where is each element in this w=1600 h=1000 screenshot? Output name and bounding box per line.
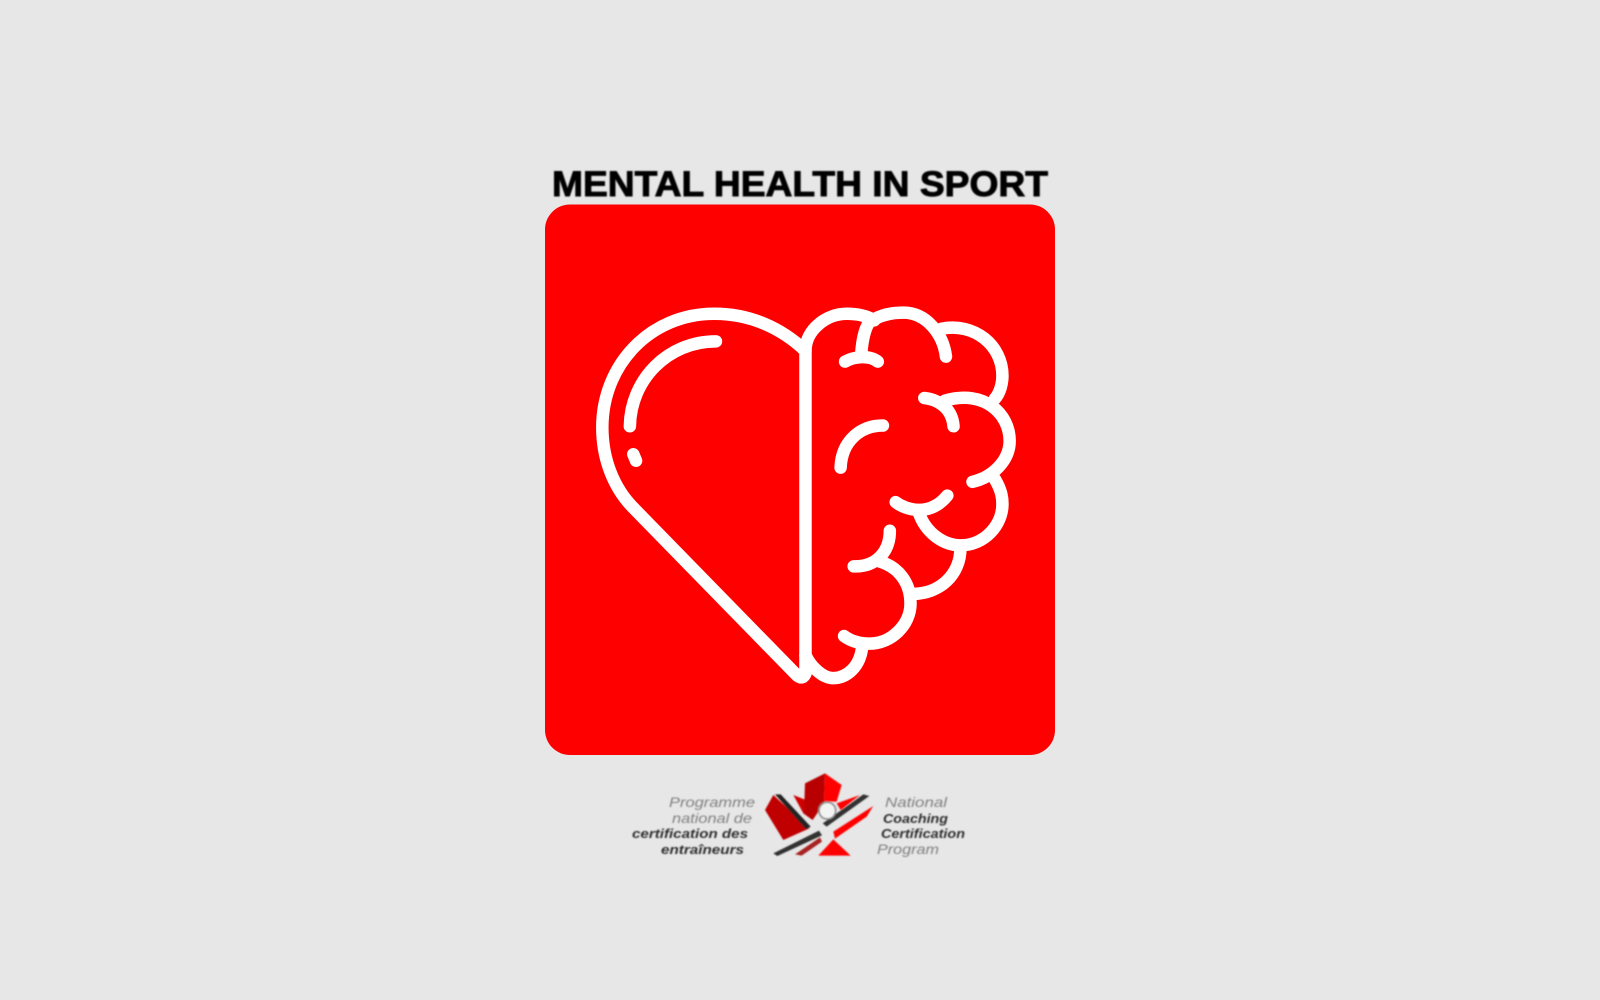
heart outline — [602, 314, 805, 677]
logo text: English: National — [885, 794, 948, 810]
logo: National Coaching Certification Program — [632, 773, 965, 857]
logo text: English — [877, 794, 965, 857]
logo text: English: Coaching — [883, 811, 948, 826]
logo text: French: Programme — [669, 794, 755, 810]
icon: heart and brain — [602, 313, 1010, 678]
panel: red icon card — [545, 204, 1055, 755]
logo text: French — [632, 794, 755, 857]
logo text: French: certification des — [632, 826, 748, 841]
logo text: French: national de — [672, 810, 752, 826]
logo mark: maple leaf and figure — [765, 773, 873, 856]
logo text: French: entraîneurs — [661, 842, 744, 857]
heart highlight — [630, 341, 716, 426]
logo text: English: Certification — [881, 826, 965, 841]
heart highlight dot — [633, 454, 636, 461]
title: MENTAL HEALTH IN SPORT — [552, 165, 1048, 204]
logo text: English: Program — [877, 841, 939, 857]
brain lobes and folds — [805, 313, 1010, 678]
